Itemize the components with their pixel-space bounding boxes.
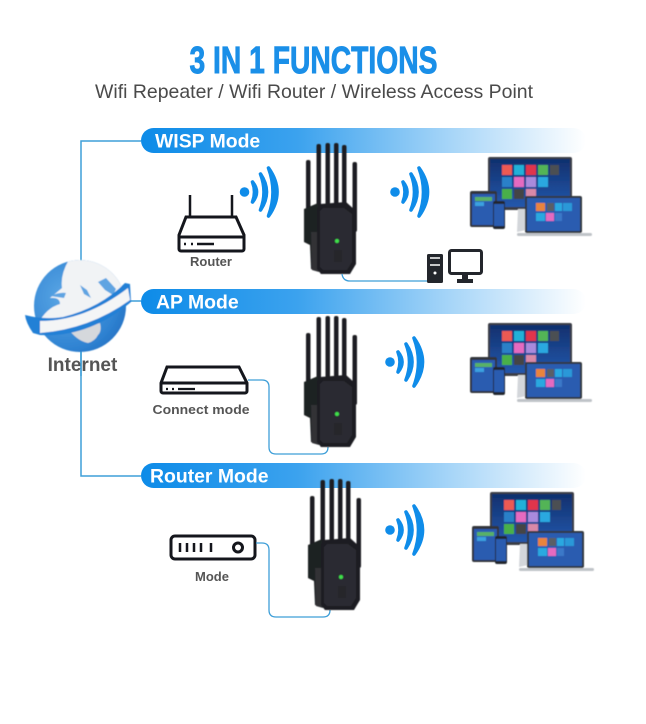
internet connection lines — [81, 141, 141, 476]
icon: router — [179, 195, 244, 251]
WISP mode header: WISP Mode — [155, 130, 260, 152]
AP mode header: AP Mode — [156, 292, 239, 314]
AP mode header — [141, 289, 586, 314]
repeater: AP — [304, 316, 357, 447]
WISP mode header — [141, 128, 586, 153]
internet label: Internet — [48, 355, 118, 376]
devices: router mode — [472, 492, 594, 571]
router mode header: Router Mode — [150, 466, 269, 488]
icon: wifi signal WISP — [390, 168, 428, 216]
icon: mode box — [171, 536, 255, 559]
cable to desktop — [342, 274, 427, 281]
icon: wifi signal router mode — [385, 506, 422, 554]
connect mode label: Connect mode — [152, 402, 250, 417]
repeater: router mode — [308, 479, 361, 610]
title: 3 IN 1 FUNCTIONS — [190, 40, 438, 82]
icon: wifi signal AP — [385, 338, 422, 386]
router label: Router — [190, 254, 232, 269]
devices: WISP — [470, 157, 592, 236]
icon: connect mode box — [161, 367, 247, 393]
router mode header — [141, 463, 586, 488]
icon: internet globe — [25, 258, 132, 352]
icon: wifi signal from router — [240, 168, 277, 216]
devices: AP — [470, 323, 592, 402]
icon: desktop computer — [427, 250, 482, 283]
subtitle: Wifi Repeater / Wifi Router / Wireless Access Point — [95, 81, 534, 103]
mode label: Mode — [195, 569, 229, 584]
cable AP — [248, 380, 328, 454]
repeater: WISP — [304, 143, 357, 274]
cable router mode — [256, 543, 330, 617]
